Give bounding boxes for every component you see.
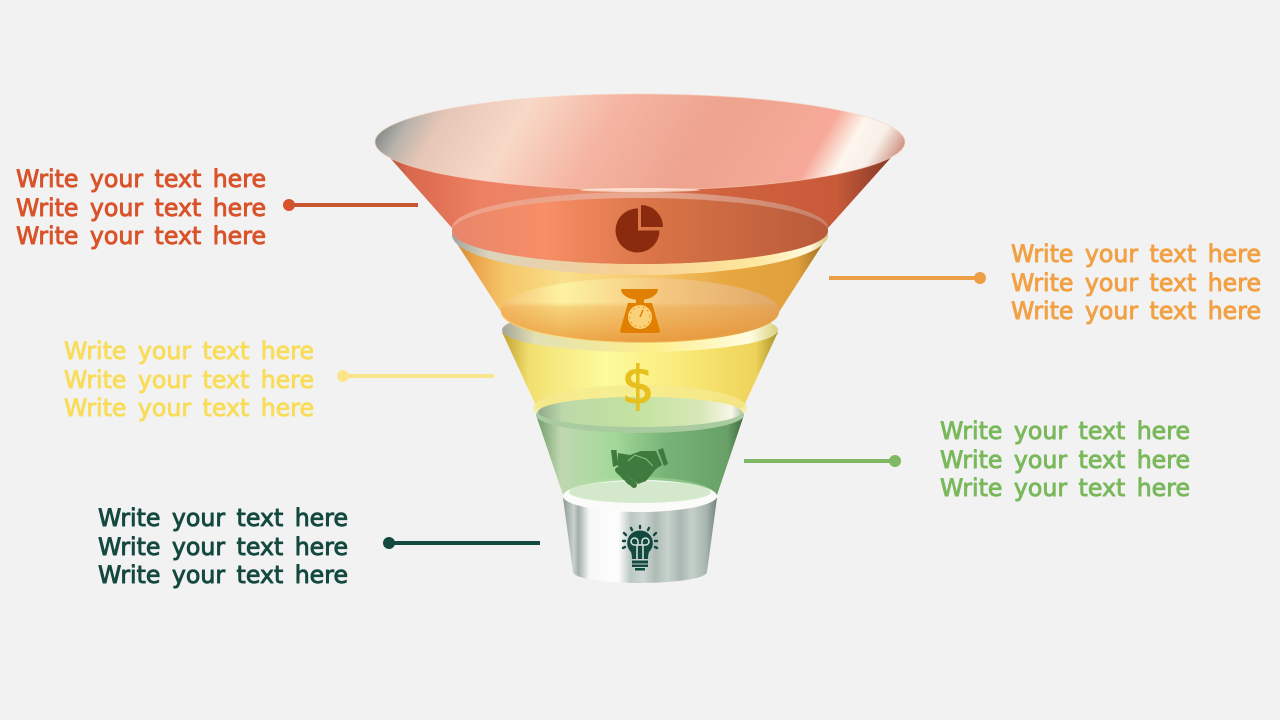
funnel section: yellow [502, 308, 778, 431]
icon: lightbulb [623, 526, 657, 570]
text block: yellow: Write your text here [64, 337, 314, 365]
funnel [375, 94, 905, 583]
funnel section: white cup [563, 480, 717, 583]
text block: yellow: Write your text here [64, 394, 314, 422]
icon: dollar sign: $ [621, 356, 655, 416]
connector: dark teal [383, 537, 540, 549]
text block: green: Write your text here [940, 446, 1190, 474]
funnel section: green rim [536, 397, 744, 433]
text block: red: Write your text here [16, 222, 266, 250]
text block: orange: Write your text here [1011, 240, 1261, 268]
text block: dark teal: Write your text here [98, 504, 348, 532]
text block: red: Write your text here [16, 165, 266, 193]
icon: pie chart [616, 205, 663, 252]
text block: orange [1011, 240, 1261, 325]
connector: red [283, 199, 418, 211]
connector: orange [829, 272, 986, 284]
text block: dark teal: Write your text here [98, 561, 348, 589]
connector: yellow [337, 370, 494, 382]
text block: green: Write your text here [940, 474, 1190, 502]
text block: yellow: Write your text here [64, 366, 314, 394]
text block: orange: Write your text here [1011, 269, 1261, 297]
text block: dark teal: Write your text here [98, 533, 348, 561]
text block: orange: Write your text here [1011, 297, 1261, 325]
text block: red: Write your text here [16, 194, 266, 222]
text block: red [16, 165, 266, 250]
funnel section: orange [452, 195, 828, 343]
text block: dark teal [98, 504, 348, 589]
funnel section: red [375, 94, 905, 264]
text block: green [940, 417, 1190, 502]
connector: green [744, 455, 901, 467]
icon: handshake [611, 448, 668, 485]
funnel section: green [536, 415, 744, 513]
text block: yellow [64, 337, 314, 422]
text block: green: Write your text here [940, 417, 1190, 445]
icon: kitchen scale [620, 289, 660, 333]
